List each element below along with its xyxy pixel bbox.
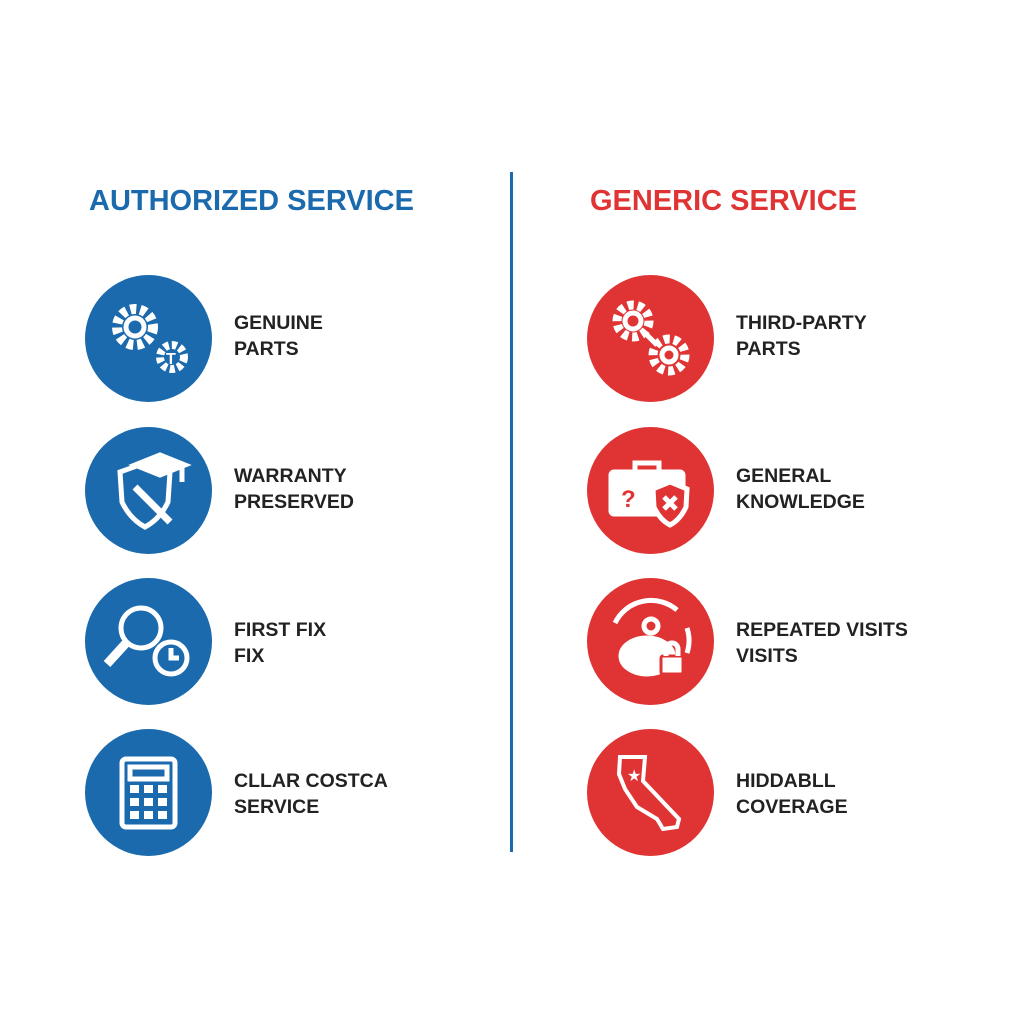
label: REPEATED VISITS [736, 619, 908, 641]
label [234, 465, 354, 513]
label: PARTS [736, 338, 801, 360]
icon: gears blue [85, 275, 212, 402]
label: FIX [234, 645, 264, 667]
icon: toolbox red [587, 427, 714, 554]
label [736, 465, 865, 513]
divider line [510, 172, 513, 852]
label [736, 619, 908, 667]
icon: gears red [587, 275, 714, 402]
title: generic: GENERIC SERVICE [590, 185, 857, 217]
icon: magnifier blue [85, 578, 212, 705]
label: THIRD-PARTY [736, 312, 867, 334]
label: KNOWLEDGE [736, 491, 865, 513]
icon: map red [587, 729, 714, 856]
label [736, 312, 867, 360]
icon: toolbox red: ? [621, 486, 636, 513]
label: SERVICE [234, 796, 319, 818]
title: authorized: AUTHORIZED SERVICE [89, 185, 414, 217]
icon: shield blue [85, 427, 212, 554]
label: PARTS [234, 338, 299, 360]
label: GENERAL [736, 465, 831, 487]
label: GENUINE [234, 312, 323, 334]
label: VISITS [736, 645, 798, 667]
icon: map red: ★ [627, 766, 641, 785]
label [234, 312, 323, 360]
label: FIRST FIX [234, 619, 326, 641]
label: COVERAGE [736, 796, 848, 818]
label [234, 619, 326, 667]
label: HIDDABLL [736, 770, 836, 792]
label [234, 770, 388, 818]
label: WARRANTY [234, 465, 347, 487]
label [736, 770, 848, 818]
icon: gears blue: T [166, 351, 176, 368]
icon: calculator blue [85, 729, 212, 856]
label: CLLAR COSTCA [234, 770, 388, 792]
label: PRESERVED [234, 491, 354, 513]
icon: piggy bank red [587, 578, 714, 705]
